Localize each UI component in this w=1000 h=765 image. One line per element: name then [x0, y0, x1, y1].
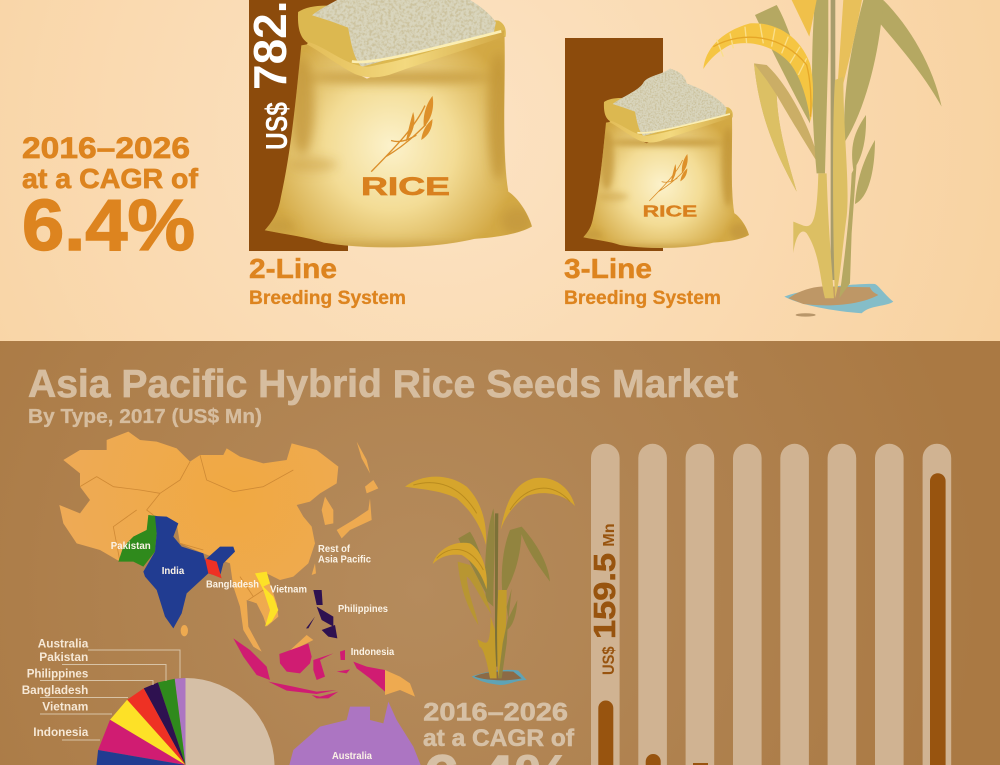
label: 3-line breeding system: 3-Line: [564, 253, 652, 284]
CAGR callout: [22, 132, 199, 266]
map labels: Pakistan: [111, 541, 151, 552]
panel: Asia Pacific market section: [0, 341, 1000, 765]
CAGR callout: at a CAGR of: [423, 725, 575, 752]
map: Asia Pacific countries: [59, 432, 421, 765]
title: Asia Pacific Hybrid Rice Seeds Market: [28, 363, 738, 406]
map labels: Philippines: [338, 604, 388, 615]
label: 3-line breeding system: Breeding System: [564, 288, 721, 309]
value: 2-line market size: US$: [259, 102, 294, 150]
map labels: Australia: [332, 751, 372, 762]
icon: large rice sack: RICE: [361, 173, 450, 201]
pie chart labels: Philippines: [27, 666, 89, 680]
pie chart leader lines: [40, 650, 180, 740]
icon: small rice sack: [582, 69, 750, 252]
label: 2-line breeding system: 2-Line: [249, 253, 337, 284]
map labels: Vietnam: [270, 585, 307, 596]
map labels: India: [162, 566, 185, 577]
CAGR callout: [423, 699, 575, 765]
pie chart labels: Bangladesh: [22, 683, 88, 697]
CAGR callout: 6.4%: [22, 186, 195, 266]
CAGR callout: 2016–2026: [22, 132, 190, 165]
icon: small rice sack: RICE: [643, 204, 698, 221]
value: first bar market size: 159.5: [587, 553, 622, 639]
bar: 3-line breeding system: [565, 38, 663, 251]
value: 2-line market size: [244, 0, 296, 150]
label: 2-line breeding system: [249, 253, 406, 309]
map labels: Indonesia: [351, 647, 395, 658]
bar: 2-line breeding system: [249, 0, 348, 251]
illustration: rice plant: [703, 0, 942, 317]
icon: large rice sack: [262, 0, 534, 253]
pie chart labels: Australia: [38, 636, 89, 650]
illustration: rice plant: [405, 477, 575, 685]
pie chart labels: Vietnam: [42, 700, 88, 714]
map labels: Rest of: [318, 544, 351, 555]
CAGR callout: 2016–2026: [423, 699, 568, 727]
pie chart labels: [22, 636, 89, 739]
map labels: [111, 541, 395, 762]
value: first bar market size: US$: [599, 646, 618, 675]
pie chart labels: Pakistan: [39, 650, 88, 664]
map labels: Asia Pacific: [318, 555, 371, 566]
subtitle: By Type, 2017 (US$ Mn): [28, 406, 262, 428]
bar chart: market by country: [591, 444, 951, 765]
value: first bar market size: Mn: [601, 523, 618, 547]
map labels: Bangladesh: [206, 580, 259, 591]
pie chart labels: Indonesia: [33, 725, 89, 739]
label: 3-line breeding system: [564, 253, 721, 309]
pie chart: share by country: [96, 678, 274, 765]
value: first bar market size: [587, 523, 622, 675]
panel: global market top section: [0, 0, 1000, 341]
label: 2-line breeding system: Breeding System: [249, 288, 406, 309]
CAGR callout: at a CAGR of: [22, 163, 199, 194]
